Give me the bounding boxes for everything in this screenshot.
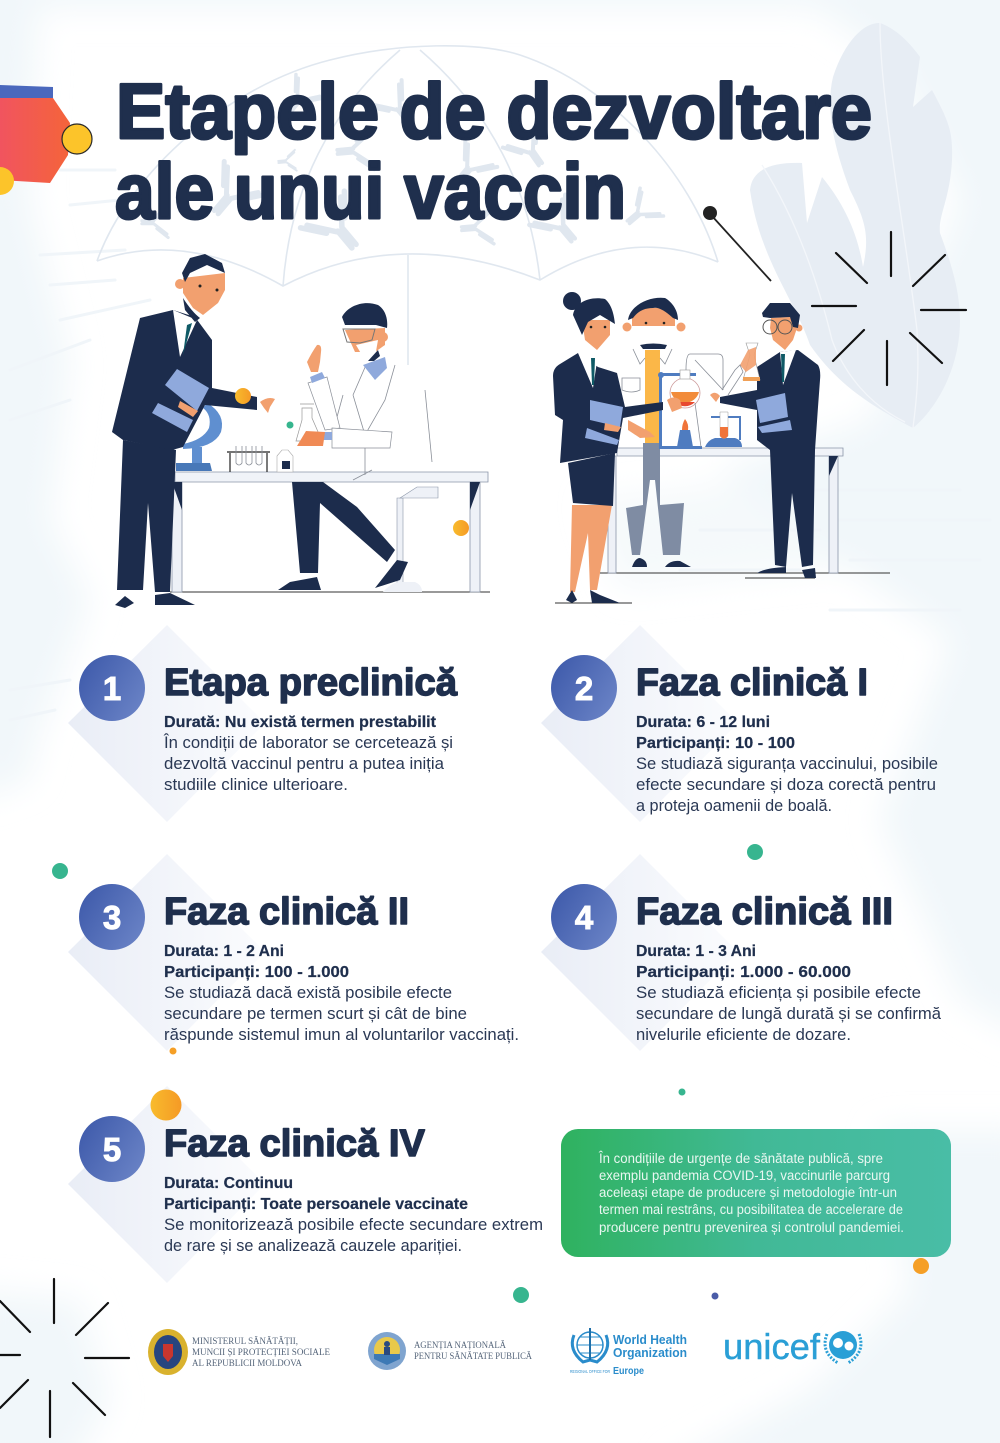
panel: clinical phase III [541, 854, 942, 1051]
panel: clinical phase II: răspunde sistemul imun al voluntarilor vaccinați. [164, 1026, 519, 1044]
panel: clinical phase III: Se studiază eficiența și posibile efecte [636, 984, 921, 1002]
panel: clinical phase II: secundare pe termen scurt și cât de bine [164, 1005, 467, 1023]
test tubes and bottle [227, 446, 293, 472]
callout: public health emergencies: În condițiile de urgențe de sănătate publică, spre [598, 1151, 883, 1166]
panel: clinical phase III: Participanți: 1.000 - 60.000 [636, 964, 851, 981]
logo: ministry of health: AL REPUBLICII MOLDOVA [192, 1358, 302, 1368]
logo: World Health Organization Europe [570, 1328, 687, 1377]
woman in suit [553, 292, 682, 603]
panel: clinical phase II: 3 [103, 899, 121, 936]
logo: public health agency: PENTRU SĂNĂTATE PUBLICĂ [414, 1351, 532, 1361]
logo: ministry of health: MUNCII ȘI PROTECȚIEI SOCIALE [192, 1347, 331, 1358]
panel: preclinical stage: În condiții de laborator se cercetează și [163, 733, 453, 752]
decorative dots [52, 388, 929, 1303]
panel: clinical phase II [68, 854, 519, 1051]
logo: public health agency: AGENȚIA NAȚIONALĂ [414, 1340, 506, 1351]
logo: World Health Organization Europe: World Health [613, 1332, 687, 1347]
callout: public health emergencies: exemplu pandemia COVID-19, vaccinurile parcurg [599, 1168, 890, 1183]
panel: clinical phase I: 2 [575, 670, 593, 707]
umbrella outline [97, 46, 718, 365]
logo: ministry of health [148, 1329, 331, 1375]
logo: unicef [723, 1326, 861, 1367]
logo: unicef: unicef [723, 1326, 821, 1367]
panel: clinical phase I: efecte secundare și doza corectă pentru [636, 776, 936, 794]
icon: pin [703, 206, 771, 281]
scientist [278, 303, 432, 590]
man in suit [112, 254, 275, 608]
panel: clinical phase II: Se studiază dacă există posibile efecte [164, 984, 452, 1002]
logo: World Health Organization Europe: REGIONAL OFFICE FOR [570, 1369, 611, 1374]
panel: clinical phase III: nivelurile eficiente de dozare. [636, 1026, 851, 1044]
panel: clinical phase IV: de rare și se analizează cauzele apariției. [164, 1237, 462, 1255]
panel: preclinical stage: Durată: Nu există termen prestabilit [164, 714, 437, 731]
panel: clinical phase III: Durata: 1 - 3 Ani [636, 943, 756, 960]
logo: World Health Organization Europe: Organization [613, 1345, 687, 1360]
panel: clinical phase II: Participanți: 100 - 1.000 [164, 964, 349, 981]
chemistry apparatus [658, 354, 742, 449]
panel: clinical phase IV: 5 [103, 1131, 121, 1168]
callout: public health emergencies: producere pentru prevenirea și controlul pandemiei. [599, 1220, 904, 1235]
panel: clinical phase I: Durata: 6 - 12 luni [636, 714, 770, 731]
callout: public health emergencies: aceleași etape de producere și metodologie într-un [599, 1185, 897, 1200]
man with glasses [710, 303, 820, 578]
panel: clinical phase I: Se studiază siguranța vaccinului, posibile [636, 755, 938, 773]
icon: rays top right [812, 232, 966, 385]
illustration: laboratory right [553, 292, 890, 603]
callout: public health emergencies: termen mai restrâns, cu posibilitatea de accelerare de [599, 1202, 903, 1217]
title: ale unui vaccin [115, 147, 626, 235]
panel: clinical phase II: Durata: 1 - 2 Ani [164, 943, 284, 960]
panel: clinical phase III: secundare de lungă durată și se confirmă [636, 1005, 942, 1023]
panel: preclinical stage: studiile clinice ulterioare. [164, 776, 348, 794]
logo: World Health Organization Europe: Europe [613, 1366, 644, 1377]
panel: clinical phase II: Faza clinică II [164, 891, 409, 933]
panel: clinical phase IV: Durata: Continuu [164, 1175, 293, 1192]
illustration: laboratory left [112, 254, 490, 608]
panel: preclinical stage: Etapa preclinică [164, 662, 458, 704]
logo: public health agency [368, 1332, 532, 1370]
decorative hexagon [0, 85, 92, 195]
panel: clinical phase I [541, 625, 938, 822]
panel: clinical phase IV: Se monitorizează posibile efecte secundare extrem [164, 1216, 543, 1234]
panel: clinical phase IV: Faza clinică IV [164, 1123, 426, 1165]
logo: ministry of health: MINISTERUL SĂNĂTĂȚII, [192, 1336, 298, 1347]
panel: clinical phase IV [68, 1086, 543, 1283]
panel: clinical phase IV: Participanți: Toate persoanele vaccinate [164, 1196, 468, 1213]
microscope [176, 403, 222, 471]
panel: clinical phase I: Participanți: 10 - 100 [636, 735, 795, 752]
panel: clinical phase III: 4 [575, 899, 594, 936]
panel: preclinical stage: 1 [103, 670, 121, 707]
panel: clinical phase I: Faza clinică I [636, 662, 868, 704]
icon: rays bottom left [0, 1279, 129, 1437]
panel: clinical phase III: Faza clinică III [636, 891, 893, 933]
man with mask [620, 298, 705, 567]
callout: public health emergencies [561, 1129, 951, 1257]
panel: preclinical stage [68, 625, 458, 822]
title [115, 67, 872, 235]
title: Etapele de dezvoltare [116, 67, 872, 155]
panel: preclinical stage: dezvoltă vaccinul pentru a putea iniția [164, 755, 445, 773]
panel: clinical phase I: a proteja oamenii de boală. [636, 797, 832, 815]
decorative leaf [750, 23, 960, 428]
